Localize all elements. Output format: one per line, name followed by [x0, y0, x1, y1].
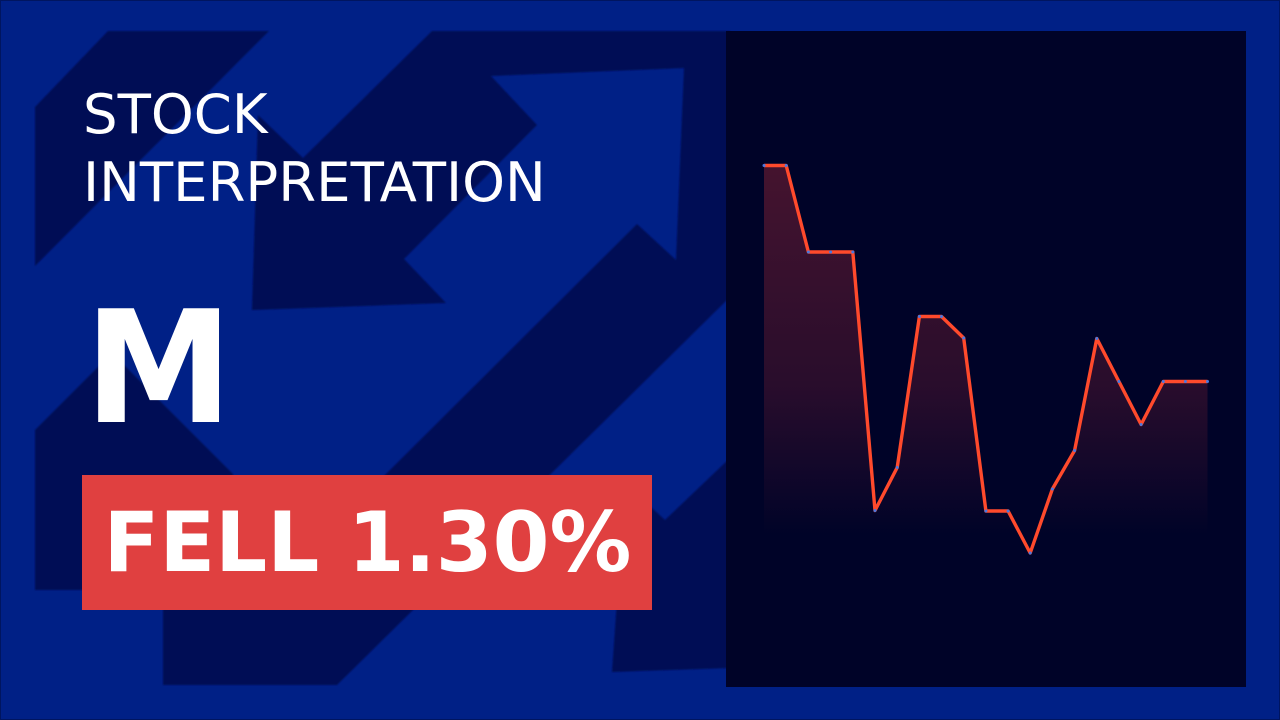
title: INTERPRETATION — [83, 150, 546, 214]
data markers — [762, 164, 1209, 554]
area fill — [764, 166, 1208, 553]
title: STOCK — [83, 82, 269, 146]
chart panel — [726, 31, 1246, 687]
price line — [764, 166, 1208, 553]
background arrows — [35, 31, 730, 685]
change badge: FELL 1.30% — [104, 495, 631, 591]
change badge — [82, 475, 652, 610]
title — [83, 82, 546, 214]
ticker symbol: M — [84, 277, 233, 459]
